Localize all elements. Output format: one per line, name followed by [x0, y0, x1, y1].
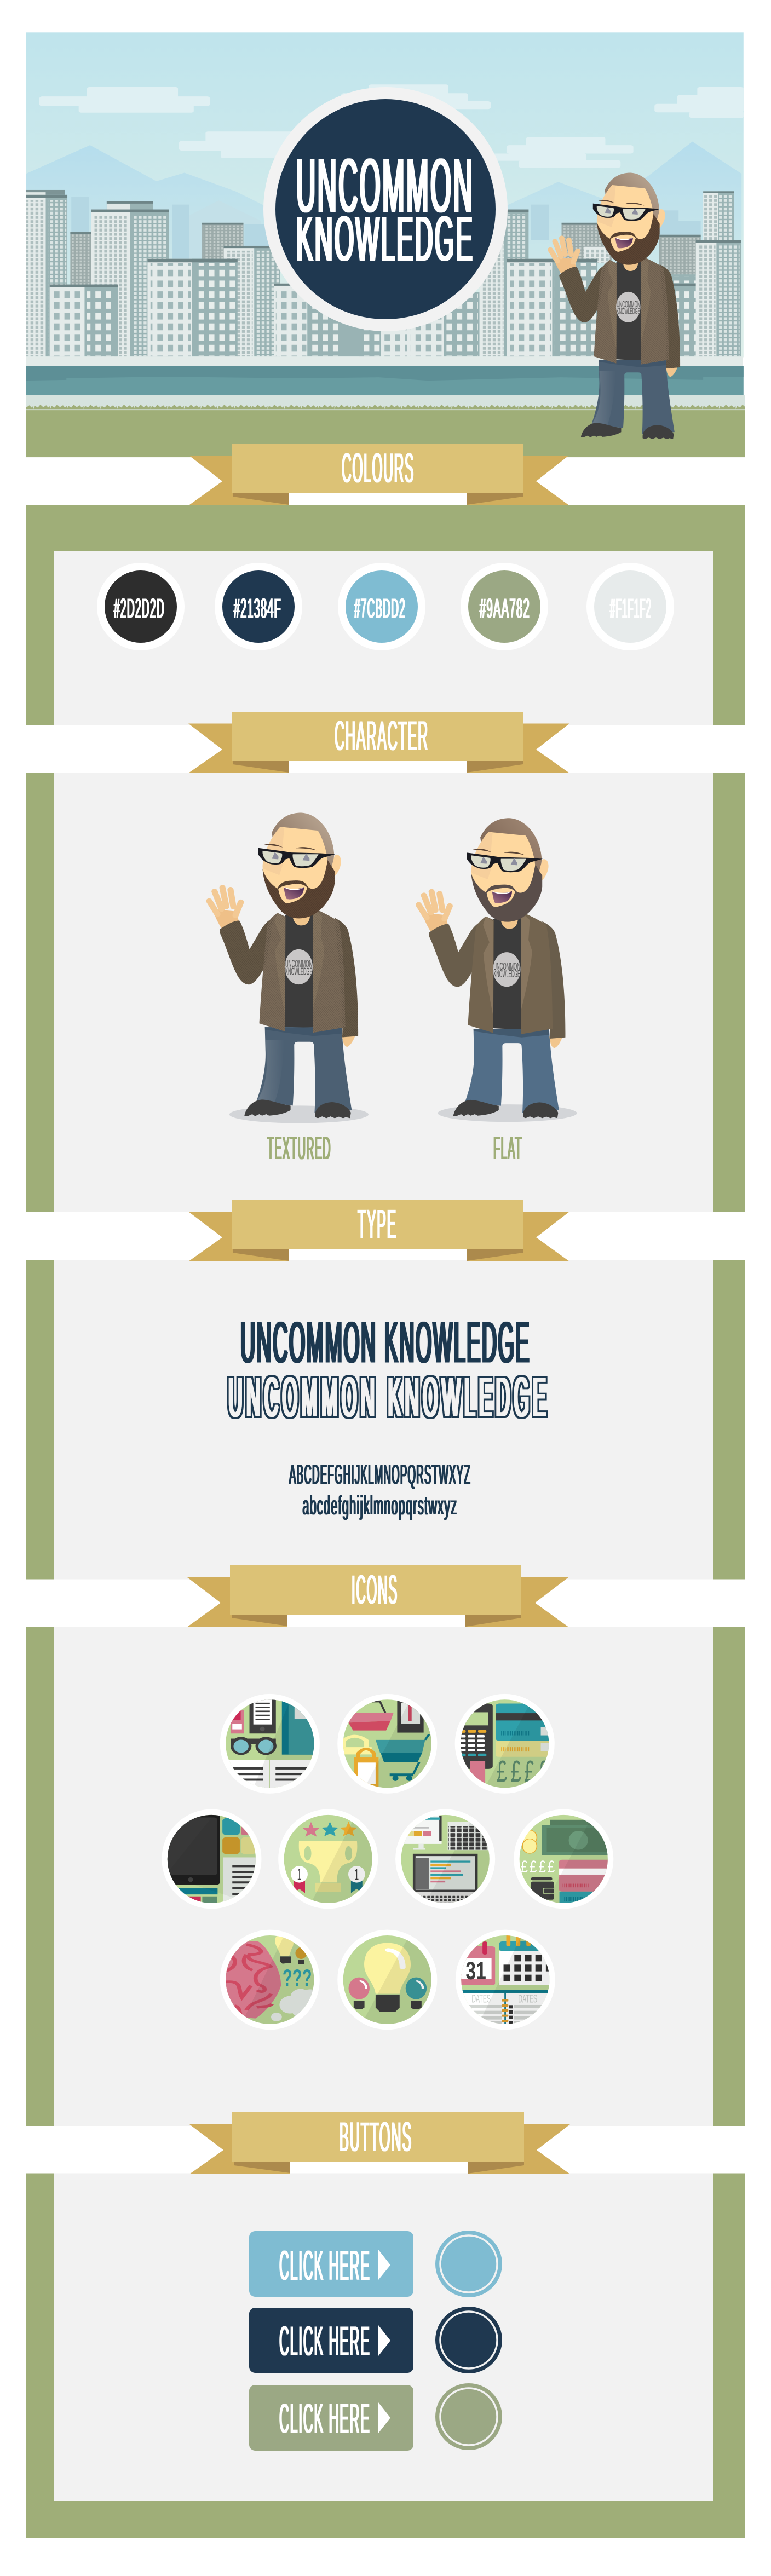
hero character: KNOWLEDGE	[617, 307, 640, 316]
swatch #7CBDD2: #7CBDD2	[354, 593, 406, 624]
hero scene	[26, 32, 745, 457]
panel: buttons: CLICK HERE	[279, 2396, 370, 2442]
panel: type: abcdefghijklmnopqrstwxyz	[302, 1491, 458, 1520]
icon: calendar: 31	[465, 1957, 486, 1985]
text: KNOWLEDGE	[296, 203, 474, 274]
panel: character: TEXTURED	[267, 1131, 331, 1166]
clouds	[39, 84, 744, 168]
icon: money: £	[548, 1857, 555, 1876]
icon: laptop and keyboard	[395, 1809, 495, 1909]
mountains	[26, 142, 741, 325]
distant buildings	[71, 197, 701, 263]
icon: shopping	[337, 1694, 437, 1794]
icon: brain and ideas	[220, 1930, 320, 2030]
panel: type: ABCDEFGHIJKLMNOPQRSTWXYZ	[289, 1459, 471, 1490]
icon: money: £	[539, 1857, 546, 1876]
panel: character: FLAT	[493, 1131, 522, 1166]
banner: buttons: BUTTONS	[340, 2114, 412, 2160]
icon: calendar: DATES	[518, 1992, 537, 2005]
round button green	[435, 2383, 502, 2450]
icon: payment card and terminal: £	[538, 1754, 549, 1788]
icon: money	[514, 1809, 613, 1909]
banner: character	[188, 712, 569, 773]
panel: icons	[26, 1627, 745, 2126]
button navy	[249, 2308, 413, 2373]
textured character: KNOWLEDGE	[285, 966, 312, 977]
city buildings	[26, 190, 741, 356]
icon: payment card and terminal: £	[511, 1754, 521, 1788]
banner: colours: COLOURS	[342, 445, 415, 492]
banner: buttons	[189, 2112, 570, 2174]
icon: payment card and terminal: £	[524, 1754, 535, 1788]
round button navy	[435, 2307, 502, 2373]
sky	[26, 32, 744, 357]
banner: type	[188, 1200, 569, 1261]
hero character: UNCOMMON	[617, 299, 640, 309]
grass	[26, 404, 745, 411]
flat character: UNCOMMON	[493, 961, 520, 972]
river and pavement	[26, 356, 743, 366]
banner: colours	[189, 444, 568, 505]
banner: icons	[187, 1565, 568, 1627]
swatch #F1F1F2	[586, 563, 674, 650]
icon: light bulbs	[337, 1930, 437, 2030]
icon: calendar	[456, 1930, 555, 2030]
logo badge	[263, 87, 508, 331]
banner: icons: ICONS	[352, 1567, 398, 1612]
swatch #21384F	[215, 563, 302, 650]
icon: money: £	[521, 1857, 528, 1876]
swatch #21384F: #21384F	[234, 593, 281, 624]
swatch #2D2D2D	[97, 563, 185, 650]
panel: type	[26, 1260, 745, 1579]
textured character	[209, 813, 369, 1123]
hero character	[550, 173, 680, 439]
panel: buttons: CLICK HERE	[279, 2318, 370, 2365]
icon: payment card and terminal	[454, 1694, 555, 1794]
icon: tablet	[159, 1809, 261, 1909]
icon: trophy: 1	[297, 1865, 301, 1884]
textured character: UNCOMMON	[285, 958, 312, 970]
button green	[249, 2385, 413, 2451]
swatch #2D2D2D: #2D2D2D	[114, 593, 165, 624]
flat character	[419, 818, 577, 1122]
icon: book, phone and glasses	[220, 1694, 320, 1794]
icon: trophy	[278, 1809, 378, 1909]
panel: character	[26, 773, 745, 1212]
panel: buttons: CLICK HERE	[279, 2243, 370, 2289]
icon: payment card and terminal: £	[497, 1754, 507, 1788]
icon: trophy: 1	[354, 1865, 359, 1884]
panel: colours	[26, 505, 745, 725]
round button blue	[435, 2231, 502, 2297]
button blue	[249, 2231, 413, 2297]
flat character: KNOWLEDGE	[493, 969, 520, 980]
swatch #7CBDD2	[338, 563, 425, 650]
banner: character: CHARACTER	[335, 713, 429, 759]
swatch #9AA782	[461, 563, 548, 650]
panel: buttons	[26, 2174, 745, 2538]
swatch #9AA782: #9AA782	[480, 593, 530, 624]
icon: money: £	[530, 1857, 537, 1876]
banner: type: TYPE	[358, 1201, 397, 1247]
swatch #F1F1F2: #F1F1F2	[610, 593, 652, 624]
icon: calendar: DATES	[471, 1992, 491, 2005]
icon: brain and ideas: ???	[283, 1964, 312, 1991]
